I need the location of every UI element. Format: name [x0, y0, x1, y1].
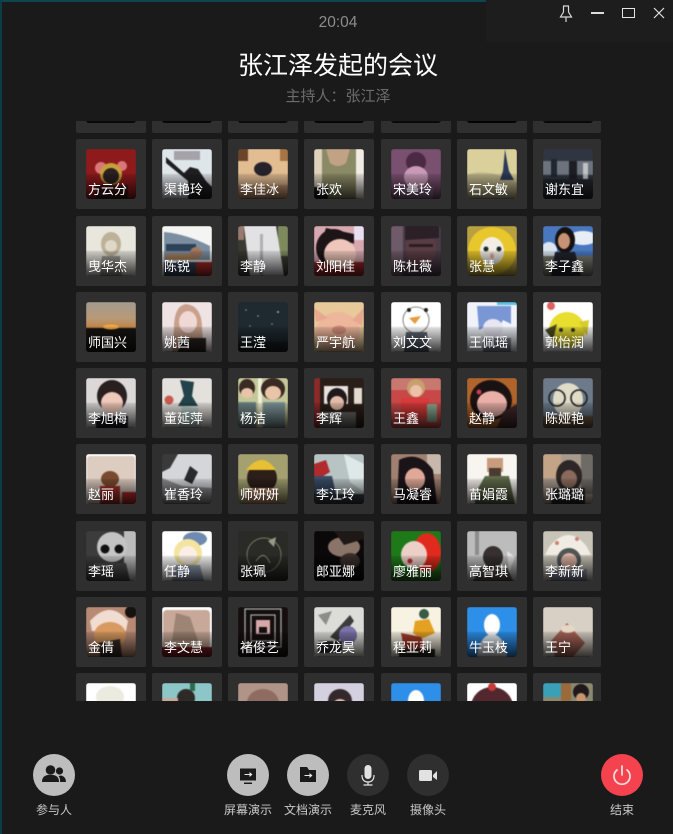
tile: 姚茜: 姚茜 [164, 335, 190, 350]
tile: 李文慧 [152, 597, 222, 667]
tile: 赵丽: 赵丽 [88, 487, 114, 502]
tile: 张欢 [304, 139, 374, 209]
tile: 刘文文 [381, 292, 451, 362]
host line: 主持人：张江泽 [285, 88, 390, 105]
tile: 任静: 任静 [164, 564, 190, 579]
tile: 张璐璐 [533, 444, 601, 514]
tile: 严宇航: 严宇航 [316, 335, 355, 350]
tile: 李佳冰: 李佳冰 [240, 182, 279, 197]
tile: 苗娟霞 [457, 444, 527, 514]
tile: 张璐璐: 张璐璐 [545, 487, 584, 502]
tile: 刘阳佳 [304, 216, 374, 286]
tile: 师国兴: 师国兴 [88, 335, 127, 350]
icon: close [654, 8, 664, 18]
tile: 廖雅丽 [381, 521, 451, 591]
tile: 郭怡润: 郭怡润 [545, 335, 584, 350]
tile: 张慧 [457, 216, 527, 286]
tile: 王佩瑶: 王佩瑶 [469, 335, 508, 350]
button: 结束: 结束 [610, 803, 634, 817]
tile: 李江玲: 李江玲 [316, 487, 355, 502]
icon: maximize [622, 8, 635, 18]
tile: 李辉 [304, 368, 374, 438]
tile: 杨洁 [228, 368, 298, 438]
tile: 牛玉枝: 牛玉枝 [469, 640, 508, 655]
tile: 李瑶: 李瑶 [88, 564, 114, 579]
tile: 杨洁: 杨洁 [240, 411, 266, 426]
tile: 苗娟霞: 苗娟霞 [469, 487, 508, 502]
tile: 程亚莉: 程亚莉 [393, 640, 432, 655]
partial top row [76, 121, 601, 133]
tile: 董延萍: 董延萍 [164, 411, 203, 426]
tile: 张珮 [228, 521, 298, 591]
tile: 渠艳玲 [152, 139, 222, 209]
partial bottom row [76, 673, 601, 701]
tile: 乔龙昊 [304, 597, 374, 667]
tile: 宋美玲 [381, 139, 451, 209]
tile: 王滢: 王滢 [240, 335, 266, 350]
tile: 师妍妍: 师妍妍 [240, 487, 279, 502]
tile: 董延萍 [152, 368, 222, 438]
tile: 陈杜薇: 陈杜薇 [393, 259, 432, 274]
tile: 王鑫: 王鑫 [393, 411, 419, 426]
tile: 李新新 [533, 521, 601, 591]
tile: 师国兴 [76, 292, 146, 362]
tile: 王滢 [228, 292, 298, 362]
tile: 刘阳佳: 刘阳佳 [316, 259, 355, 274]
tile: 张欢: 张欢 [316, 182, 342, 197]
icon: minimize [591, 12, 604, 14]
tile: 郎亚娜 [304, 521, 374, 591]
button: 屏幕演示 [224, 754, 272, 817]
tile: 陈锐: 陈锐 [164, 259, 190, 274]
tile: 郎亚娜: 郎亚娜 [316, 564, 355, 579]
button: 文档演示 [284, 754, 332, 817]
button: 摄像头: 摄像头 [410, 803, 446, 817]
tile: 王佩瑶 [457, 292, 527, 362]
control bar [33, 754, 643, 817]
tile: 李文慧: 李文慧 [164, 640, 203, 655]
button: 参与人 [33, 754, 75, 817]
button: 参与人: 参与人 [36, 803, 72, 817]
tile: 陈杜薇 [381, 216, 451, 286]
tile: 李瑶 [76, 521, 146, 591]
tile: 褚俊艺 [228, 597, 298, 667]
tile: 陈锐 [152, 216, 222, 286]
tile: 赵丽 [76, 444, 146, 514]
tile: 谢东宜 [533, 139, 601, 209]
tile: 李辉: 李辉 [316, 411, 342, 426]
tile: 李江玲 [304, 444, 374, 514]
tile: 李新新: 李新新 [545, 564, 584, 579]
tile: 陈娅艳 [533, 368, 601, 438]
top accent line [0, 0, 486, 2]
tile: 李旭梅: 李旭梅 [88, 411, 127, 426]
tile: 王宁: 王宁 [545, 640, 571, 655]
tile: 李旭梅 [76, 368, 146, 438]
icon: pin [560, 5, 572, 22]
tile: 高智琪 [457, 521, 527, 591]
tile: 石文敏 [457, 139, 527, 209]
tile: 褚俊艺: 褚俊艺 [240, 640, 279, 655]
tile: 李静 [228, 216, 298, 286]
tile: 高智琪: 高智琪 [469, 564, 508, 579]
tile: 金倩: 金倩 [88, 640, 114, 655]
button: 麦克风 [347, 754, 389, 817]
tile: 马凝睿 [381, 444, 451, 514]
tile: 赵静: 赵静 [469, 411, 495, 426]
tile: 李静: 李静 [240, 259, 266, 274]
tile: 张珮: 张珮 [240, 564, 266, 579]
tile: 刘文文: 刘文文 [393, 335, 432, 350]
title: 张江泽发起的会议 [238, 52, 438, 80]
tile: 赵静 [457, 368, 527, 438]
tile: 王鑫 [381, 368, 451, 438]
tile: 李子鑫: 李子鑫 [545, 259, 584, 274]
tile: 曳华杰 [76, 216, 146, 286]
tile: 方云分: 方云分 [88, 182, 127, 197]
tile: 乔龙昊: 乔龙昊 [316, 640, 355, 655]
tile: 师妍妍 [228, 444, 298, 514]
tile: 张慧: 张慧 [469, 259, 495, 274]
tile: 李佳冰 [228, 139, 298, 209]
meeting timer: 20:04 [319, 14, 357, 31]
tile: 宋美玲: 宋美玲 [393, 182, 432, 197]
tile: 李子鑫 [533, 216, 601, 286]
tile: 崔香玲 [152, 444, 222, 514]
button: 结束 [601, 754, 643, 817]
button: 麦克风: 麦克风 [350, 803, 386, 817]
tile: 程亚莉 [381, 597, 451, 667]
left edge sliver [0, 0, 2, 834]
tile: 金倩 [76, 597, 146, 667]
tile: 陈娅艳: 陈娅艳 [545, 411, 584, 426]
tile: 石文敏: 石文敏 [469, 182, 508, 197]
tile: 严宇航 [304, 292, 374, 362]
tile: 渠艳玲: 渠艳玲 [164, 182, 203, 197]
button: 文档演示: 文档演示 [284, 803, 332, 817]
tile: 王宁 [533, 597, 601, 667]
tile: 谢东宜: 谢东宜 [545, 182, 584, 197]
window control bar [486, 0, 673, 42]
tile: 廖雅丽: 廖雅丽 [393, 564, 432, 579]
button: 屏幕演示: 屏幕演示 [224, 803, 272, 817]
tile: 牛玉枝 [457, 597, 527, 667]
tile: 任静 [152, 521, 222, 591]
tile: 姚茜 [152, 292, 222, 362]
tile: 马凝睿: 马凝睿 [393, 487, 432, 502]
tile: 方云分 [76, 139, 146, 209]
tile: 曳华杰: 曳华杰 [88, 259, 127, 274]
tile: 崔香玲: 崔香玲 [164, 487, 203, 502]
participant grid [76, 121, 601, 701]
tile: 郭怡润 [533, 292, 601, 362]
button: 摄像头 [407, 754, 449, 817]
